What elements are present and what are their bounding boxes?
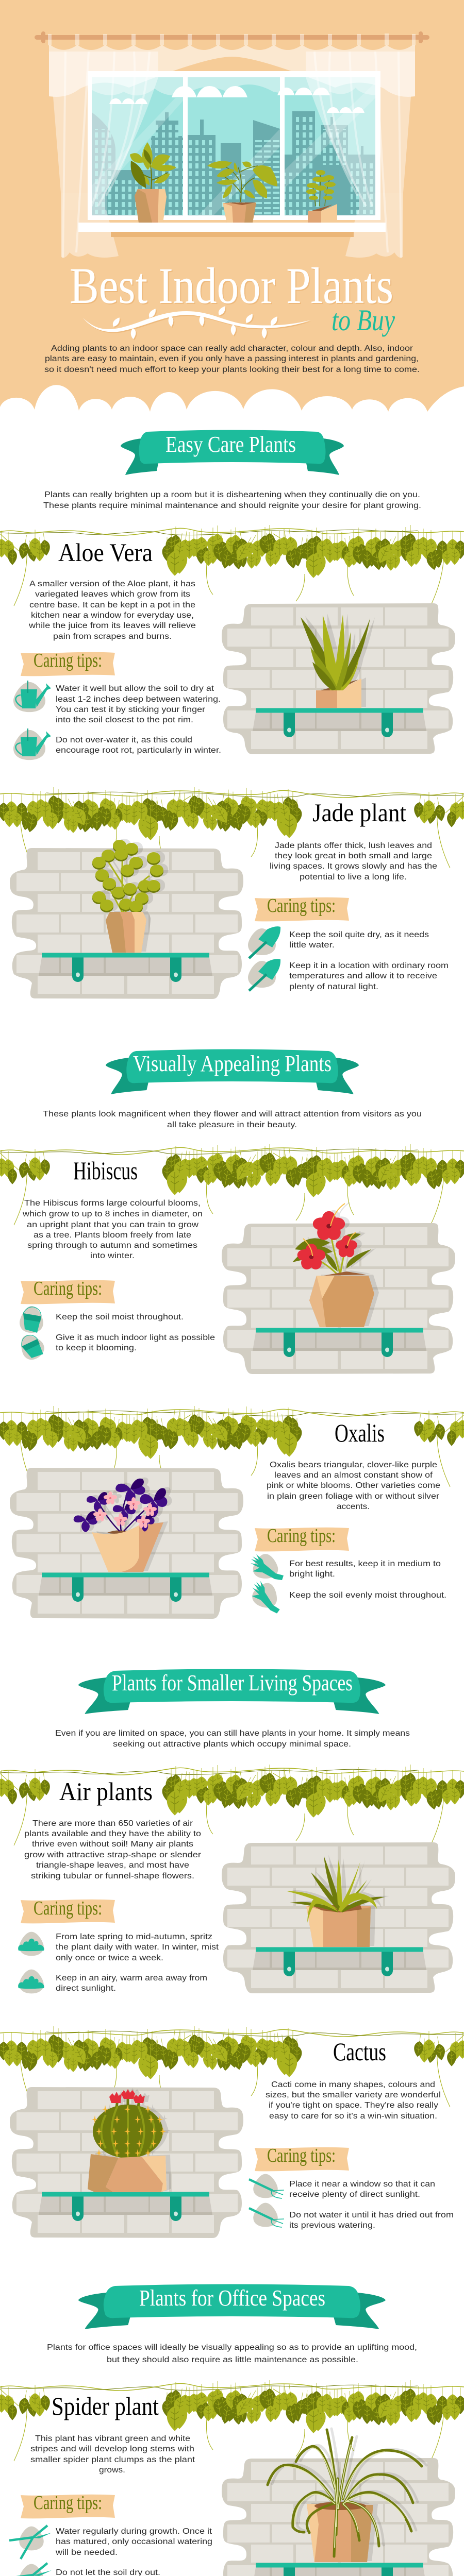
tip 1: least 1-2 inches deep between watering.	[56, 695, 221, 704]
description	[24, 1819, 201, 1880]
caring tips label	[21, 1897, 115, 1923]
description: if you're tight on space. They're also really	[269, 2101, 438, 2110]
description	[30, 2434, 195, 2475]
spider plant in pot	[268, 2430, 422, 2562]
tip 2: its previous watering.	[289, 2221, 375, 2230]
description	[28, 580, 196, 641]
tip 1: receive plenty of direct sunlight.	[289, 2190, 420, 2199]
section banner: plants for office spaces	[78, 2284, 386, 2329]
description: triangle-shape leaves, and most have	[36, 1861, 189, 1870]
section banner: plants for smaller living spaces: Plants for Smaller Living Spaces	[112, 1670, 353, 1696]
intro text: plants are easy to maintain, even if you only have a passing interest in plants and gardening,	[45, 354, 419, 363]
vine	[0, 1144, 464, 1225]
description	[267, 1461, 440, 1511]
tip 2	[248, 959, 449, 991]
description: leaves and an almost constant show of	[274, 1471, 433, 1480]
section intro: smaller spaces: seeking out attractive plants which occupy minimal space.	[113, 1740, 351, 1749]
window with city view	[88, 71, 380, 220]
tip 1: has matured, only occasional watering	[56, 2537, 212, 2546]
window sill	[78, 223, 386, 237]
tip 1	[13, 681, 221, 724]
tip 1: For best results, keep it in medium to	[289, 1560, 441, 1568]
tip 1	[9, 2526, 212, 2559]
description: grows.	[99, 2466, 125, 2475]
description: Oxalis bears triangular, clover-like purple	[270, 1461, 437, 1469]
tip 1	[249, 2174, 435, 2199]
tip 1	[20, 1306, 184, 1333]
description: striking tubular or funnel-shape flowers.	[31, 1872, 194, 1880]
vine	[0, 1406, 464, 1487]
tip 2	[9, 2563, 160, 2576]
description	[270, 841, 437, 882]
brick wall with shelf	[10, 2087, 243, 2238]
section banner: easy care plants	[121, 430, 344, 475]
vine	[0, 2380, 464, 2461]
description: as a tree. Plants bloom freely from late	[34, 1231, 191, 1240]
description: accents.	[337, 1502, 370, 1511]
panel: air plants	[0, 1765, 464, 1993]
caring tips label: Caring tips:	[267, 1525, 336, 1547]
title: Best Indoor Plants	[70, 257, 393, 314]
description: while the juice from its leaves will relieve	[28, 621, 196, 630]
description: grow with attractive strap-shape or slender	[24, 1851, 201, 1859]
sill plant: serrated leaf	[207, 161, 277, 223]
caring tips label	[21, 1278, 115, 1304]
caring tips label	[255, 1525, 349, 1551]
tip 2: Do not over-water it, as this could	[56, 736, 192, 744]
section banner: visually appealing plants: Visually Appealing Plants	[133, 1051, 332, 1076]
sill plant: broad leaf	[130, 142, 176, 223]
description: variegated leaves which grow from its	[35, 590, 190, 599]
tip 1: only once or twice a week.	[56, 1954, 163, 1962]
tip 1: the plant daily with water. In winter, mist	[56, 1943, 219, 1952]
aloe plant in pot	[301, 615, 370, 708]
tip 2: temperatures and allow it to receive	[289, 972, 437, 980]
tip 2	[18, 1970, 207, 1993]
description: This plant has vibrant green and white	[35, 2434, 190, 2443]
panel: cactus	[0, 2026, 464, 2238]
description: easy to care for so it's a win-win situation.	[269, 2112, 437, 2121]
vine	[0, 2026, 464, 2107]
section intro: smaller spaces	[55, 1729, 410, 1749]
tip 2	[247, 1579, 446, 1614]
tip 2	[249, 2203, 454, 2230]
section intro: visually appealing: These plants look magnificent when they flower and will attract attention from visitors as you	[43, 1110, 422, 1118]
heading: Oxalis	[335, 1418, 385, 1447]
description: The Hibiscus forms large colourful blooms,	[24, 1199, 201, 1208]
description: living spaces. It grows slowly and has the	[270, 862, 437, 871]
vine	[0, 525, 464, 606]
caring tips label: Caring tips:	[34, 1278, 102, 1299]
tip 2: Keep the soil evenly moist throughout.	[289, 1591, 446, 1600]
caring tips label: Caring tips:	[267, 2145, 336, 2166]
tip 1: bright light.	[289, 1570, 335, 1579]
description: into winter.	[90, 1251, 135, 1260]
brick wall with shelf	[10, 1468, 243, 1619]
description: thrive even without soil! Many air plants	[32, 1840, 193, 1849]
intro text: so it doesn't need much effort to keep your plants looking their best for a long time to come.	[44, 365, 420, 374]
header scalloped edge	[0, 385, 464, 417]
tip 2	[15, 1330, 215, 1364]
panel: spider plant	[0, 2380, 464, 2576]
tip 1: Place it near a window so that it can	[289, 2180, 435, 2189]
section intro: visually appealing	[43, 1110, 422, 1129]
caring tips label: Caring tips:	[34, 2492, 102, 2514]
description	[22, 1199, 203, 1260]
section intro: smaller spaces: Even if you are limited on space, you can still have plants in your home. It simply means	[55, 1729, 410, 1738]
oxalis in pot	[74, 1479, 167, 1572]
tip 1	[251, 1554, 441, 1580]
curtain rod	[35, 31, 429, 43]
description: sizes, but the smaller variety are wonderful	[266, 2091, 441, 2099]
description: potential to live a long life.	[300, 873, 407, 882]
tip 1: into the soil closest to the pot rim.	[56, 716, 193, 724]
section intro: office spaces	[47, 2343, 417, 2364]
description: A smaller version of the Aloe plant, it has	[29, 580, 195, 588]
caring tips label	[21, 650, 115, 676]
section intro: office spaces: Plants for office spaces will ideally be visually appealing so as to provide an uplifting mood,	[47, 2343, 417, 2352]
heading: Spider plant	[52, 2392, 159, 2420]
heading: Hibiscus	[73, 1156, 138, 1185]
brick wall with shelf	[222, 1842, 455, 1993]
tip 2: direct sunlight.	[56, 1984, 116, 1993]
heading: Aloe Vera	[58, 538, 153, 567]
section intro: easy care: These plants require minimal maintenance and should reignite your desire for plant growing.	[43, 501, 421, 510]
caring tips label	[255, 2145, 349, 2171]
brick wall with shelf	[222, 1223, 455, 1374]
brick wall with shelf	[222, 603, 455, 754]
tip 2: Keep it in a location with ordinary room	[289, 961, 449, 970]
brick wall with shelf	[10, 848, 243, 999]
caring tips label: Caring tips:	[34, 1897, 102, 1919]
section banner: visually appealing plants	[106, 1049, 359, 1094]
tip 1: little water.	[289, 941, 335, 950]
jade plant in pot	[92, 840, 163, 953]
panel: hibiscus	[0, 1144, 464, 1374]
tip 1: Keep the soil moist throughout.	[56, 1313, 184, 1321]
cactus in pot	[88, 2089, 167, 2192]
description: Cacti come in many shapes, colours and	[271, 2080, 435, 2089]
description: plants available and they have the ability to	[24, 1829, 201, 1838]
hibiscus in pot	[292, 1204, 374, 1327]
caring tips label	[255, 895, 349, 921]
heading: Air plants	[59, 1777, 153, 1806]
heading: Cactus	[333, 2037, 386, 2066]
section intro: easy care: Plants can really brighten up a room but it is disheartening when they continually die on you.	[44, 490, 420, 499]
caring tips label	[21, 2492, 115, 2518]
tip 1: will be needed.	[55, 2548, 118, 2557]
section banner: plants for smaller living spaces	[78, 1669, 386, 1714]
tip 2: Do not water it until it has dried out from	[289, 2211, 454, 2219]
section banner: easy care plants: Easy Care Plants	[165, 432, 296, 457]
intro text	[44, 344, 420, 374]
subtitle: to Buy	[332, 303, 395, 337]
description: in plain green foliage with or without silver	[267, 1492, 439, 1501]
tip 1: You can test it by sticking your finger	[56, 705, 205, 714]
tip 2: encourage root rot, particularly in winter.	[56, 746, 221, 755]
tip 1	[248, 926, 429, 958]
tip 1: From late spring to mid-autumn, spritz	[56, 1933, 212, 1941]
section intro: office spaces: but they should also require as little maintenance as possible.	[107, 2355, 358, 2364]
sill plant: fern	[306, 170, 337, 223]
description: There are more than 650 varieties of air	[32, 1819, 193, 1828]
description: kitchen near a window for everyday use,	[31, 611, 194, 620]
description	[266, 2080, 441, 2121]
tip 2	[13, 728, 221, 760]
description: spring through to autumn and sometimes	[27, 1241, 197, 1250]
panel: oxalis	[0, 1406, 464, 1619]
description: smaller spider plant clumps as the plant	[30, 2455, 195, 2464]
description: pink or white blooms. Other varieties come	[267, 1481, 440, 1490]
sheer curtains	[48, 33, 416, 258]
tip 2: Give it as much indoor light as possible	[56, 1333, 215, 1342]
intro text: Adding plants to an indoor space can really add character, colour and depth. Also, indoor	[51, 344, 413, 353]
tip 1: Water it well but allow the soil to dry at	[56, 684, 214, 693]
section banner: plants for office spaces: Plants for Office Spaces	[139, 2285, 325, 2311]
air plant in pot	[287, 1856, 385, 1947]
tip 2: Keep in an airy, warm area away from	[56, 1974, 207, 1982]
description: Jade plants offer thick, lush leaves and	[275, 841, 432, 850]
panel: aloe vera	[0, 525, 464, 760]
tip 1: Keep the soil quite dry, as it needs	[289, 930, 429, 939]
description: centre base. It can be kept in a pot in the	[29, 601, 195, 609]
section intro: visually appealing: all take pleasure in their beauty.	[167, 1121, 297, 1129]
section intro: easy care	[43, 490, 421, 510]
tip 1: Water regularly during growth. Once it	[56, 2527, 212, 2536]
description: an upright plant that you can train to grow	[27, 1221, 199, 1229]
description: pain from scrapes and burns.	[53, 632, 172, 641]
brick wall with shelf	[222, 2458, 455, 2576]
panel: jade plant	[0, 787, 464, 999]
description: stripes and will develop long stems with	[30, 2445, 194, 2453]
tip 2: plenty of natural light.	[289, 982, 378, 991]
description: they look great in both small and large	[275, 852, 432, 860]
tip 1	[18, 1932, 219, 1962]
caring tips label: Caring tips:	[34, 650, 102, 671]
caring tips label: Caring tips:	[267, 895, 336, 917]
header panel	[0, 0, 464, 417]
tip 2: to keep it blooming.	[56, 1344, 137, 1352]
vine	[0, 1765, 464, 1845]
decorative branch	[83, 304, 312, 341]
description: which grow to up to 8 inches in diameter, on	[22, 1210, 203, 1218]
vine	[0, 787, 464, 868]
heading: Jade plant	[312, 798, 406, 827]
